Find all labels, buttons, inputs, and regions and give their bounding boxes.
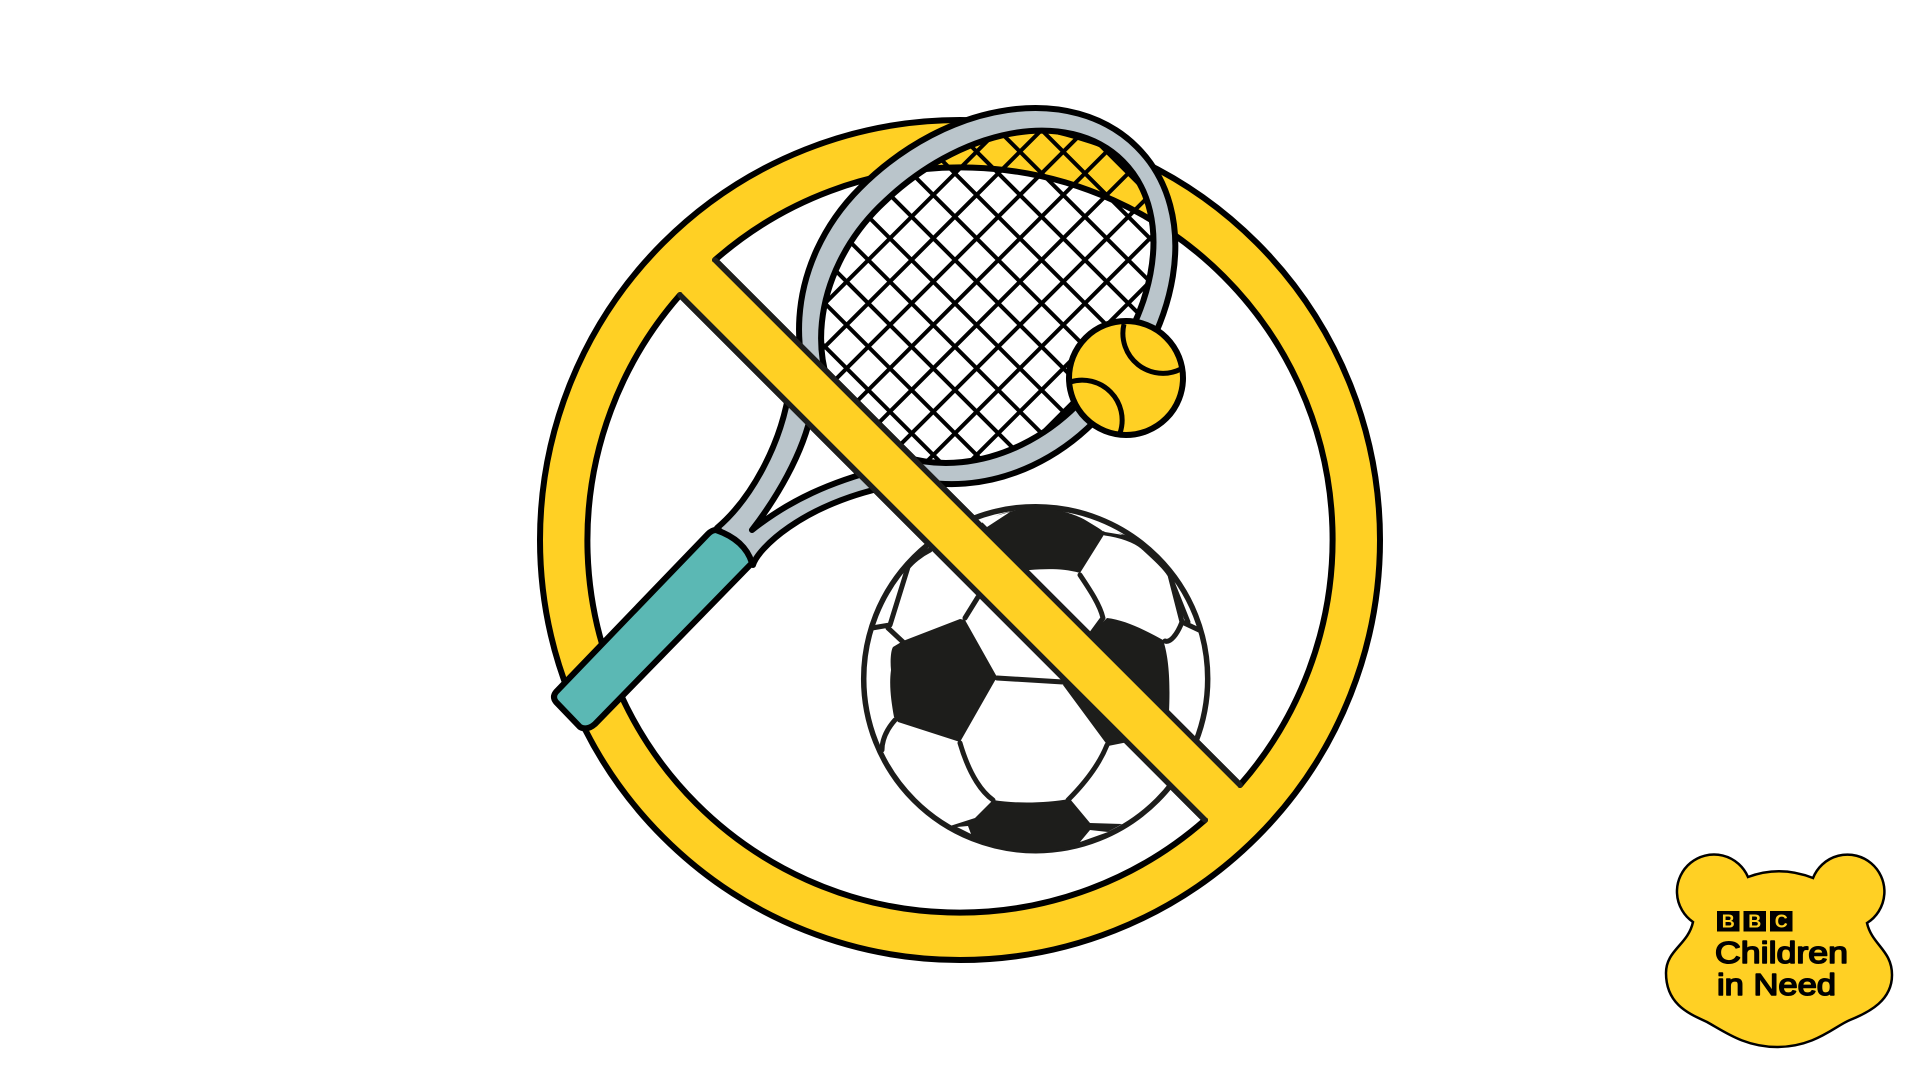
icon: football [864,507,1208,853]
football seams [872,533,1199,800]
prohibition ring [540,120,1380,960]
logo: BBC Children in Need [1666,855,1892,1047]
football patch: right [1063,618,1169,746]
racket strings [824,134,1150,460]
logo wordmark [1715,935,1848,1002]
logo BBC blocks: C [1775,912,1788,932]
football patch: bottom [950,799,1122,853]
racket frame [725,29,1253,556]
prohibition bar [680,260,1240,820]
racket throat [717,385,890,565]
logo bear head [1666,855,1892,1047]
logo BBC blocks: B [1748,912,1761,932]
football patch: left [890,619,997,742]
football patch: top [980,508,1105,573]
icon: tennis ball [1069,321,1183,435]
logo wordmark: Children [1715,935,1848,970]
logo BBC blocks [1717,911,1792,932]
football highlights [957,512,1123,842]
infographic canvas [537,105,1894,1048]
logo wordmark: in Need [1717,967,1836,1002]
icon: tennis racket [554,0,1253,782]
racket handle [554,530,752,728]
logo BBC blocks: B [1722,912,1735,932]
